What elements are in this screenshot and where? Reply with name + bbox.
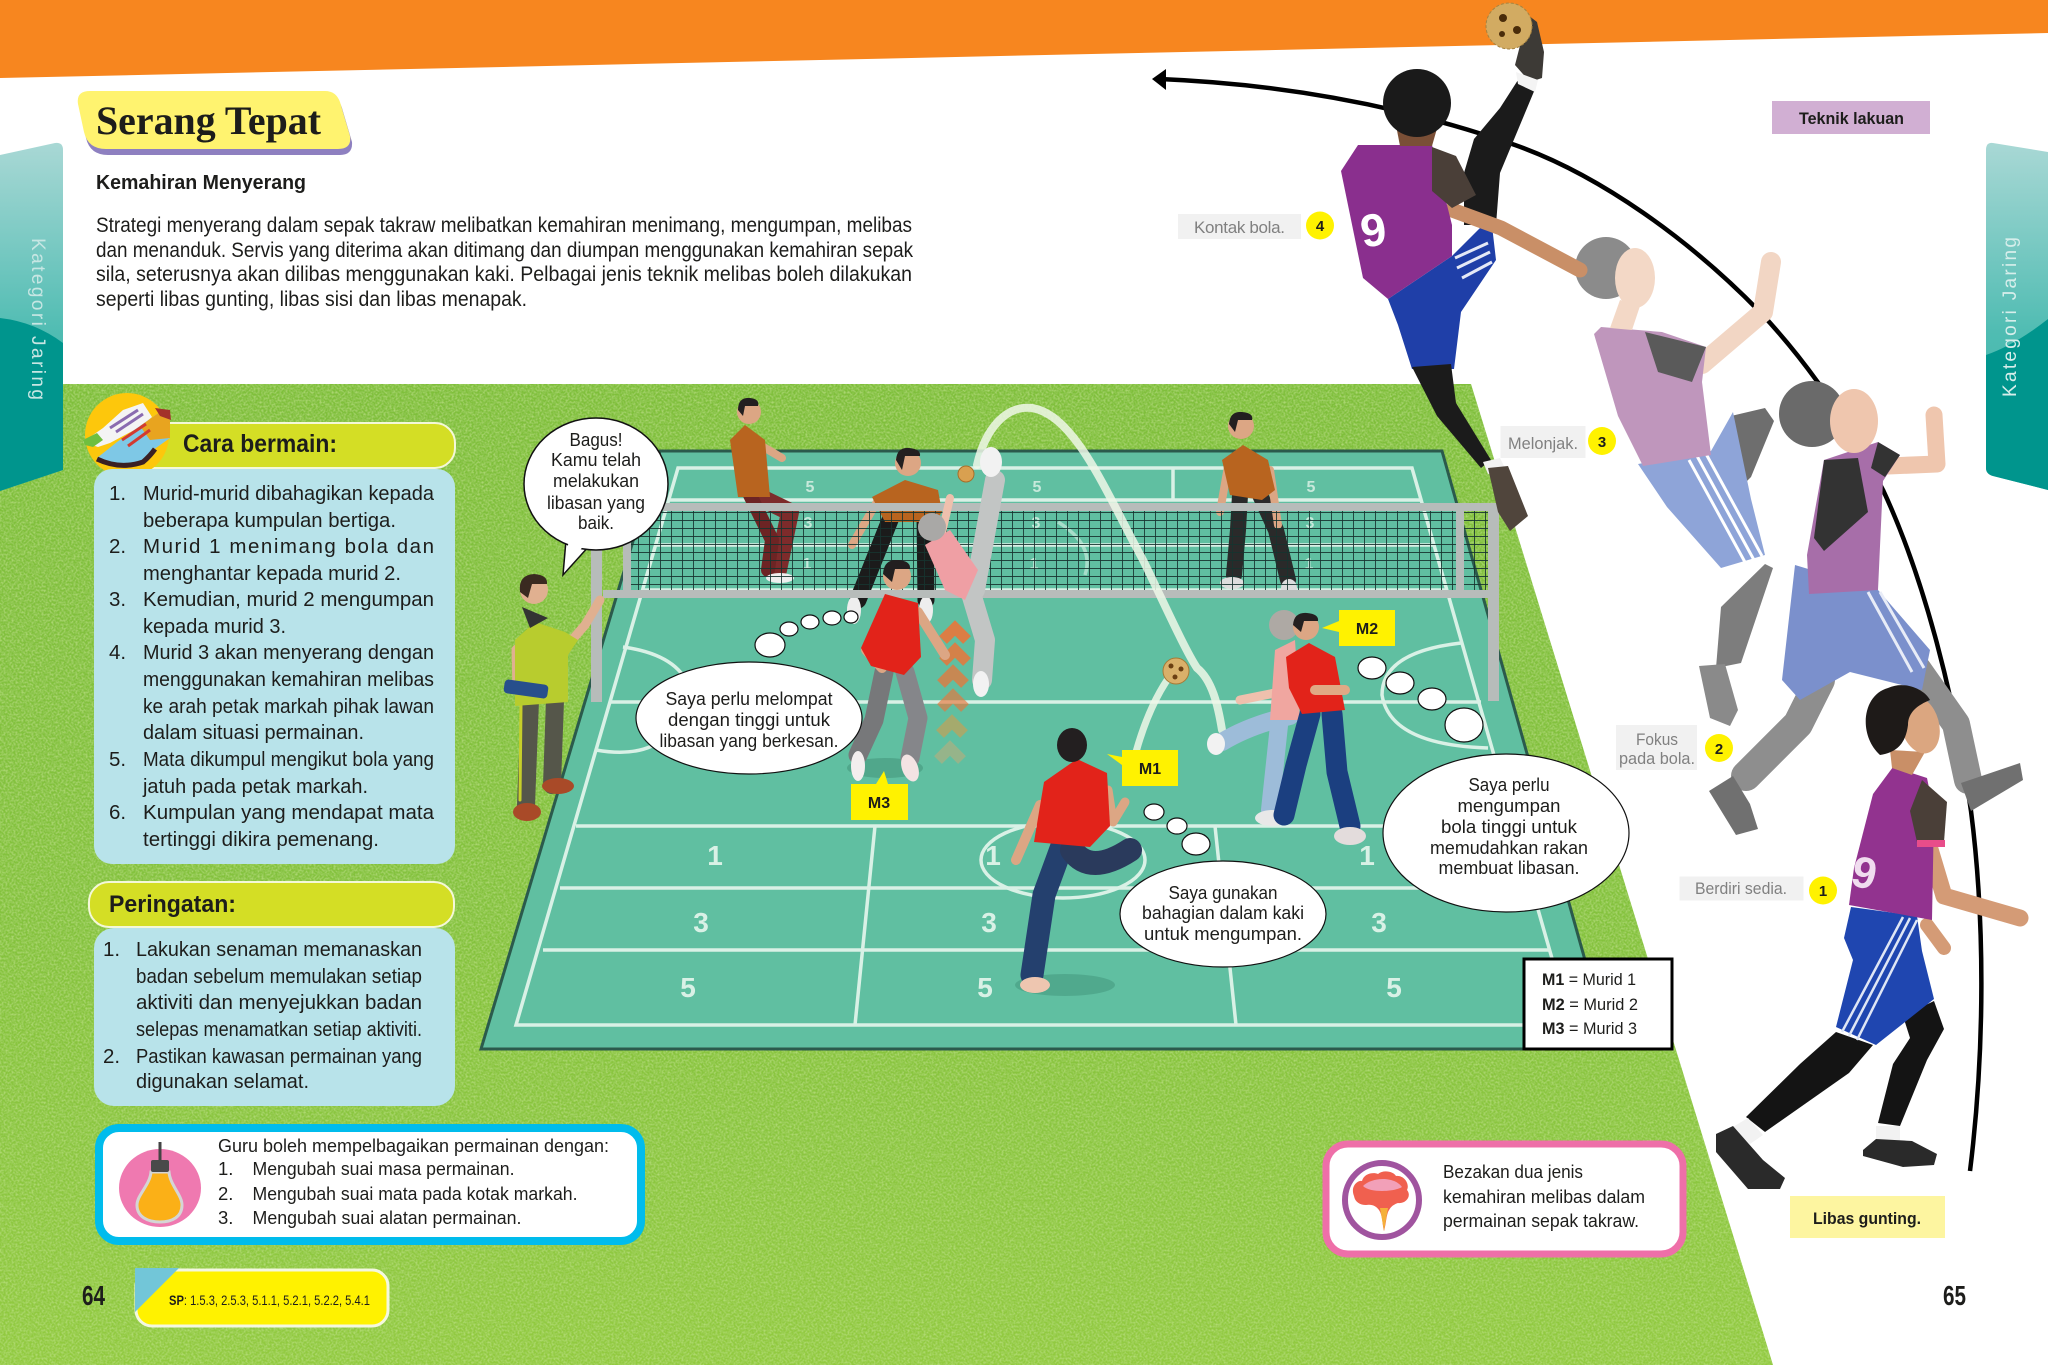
thought bubble: M1: Saya gunakan [1168,883,1278,903]
label: teknik lakuan: Teknik lakuan [1799,109,1904,128]
court numbers: 1 [985,840,1001,871]
step 1 label: 1 [1819,883,1827,900]
court numbers: 5 [1307,479,1316,496]
thought bubble: M3: dengan tinggi untuk [668,710,831,730]
figure: step 2 focus (faded) [1709,381,2023,835]
panel: peringatan list: 1. [103,938,120,961]
court numbers: 1 [1359,840,1375,871]
speech bubble: coach: melakukan [553,471,639,491]
speech bubble: coach: libasan yang [547,493,645,513]
panel: cara bermain steps: menggunakan kemahiran melibas [143,668,434,691]
speech bubble: coach [524,418,668,575]
panel: peringatan list: 2. [103,1045,120,1068]
step 4 label [1178,212,1334,240]
step 3 label: 3 [1598,434,1606,451]
panel: cara bermain steps: jatuh pada petak markah. [142,775,368,798]
step 4 label: 4 [1316,218,1325,235]
step 4 label: Kontak bola. [1194,218,1285,237]
motion arc arrow [1152,69,1981,1171]
ball in the air near net [958,466,974,482]
court numbers: 3 [1032,515,1041,532]
legend box [1524,959,1672,1049]
label M3: M3 [868,795,890,812]
thought bubble: M2: membuat libasan. [1438,858,1580,878]
court numbers [680,479,1402,1003]
panel: cara bermain steps: ke arah petak markah pihak lawan [143,695,434,718]
panel: cara bermain steps: 5. [109,748,126,771]
ball flight trail [977,408,1222,752]
figure: step 1 ready [1716,685,2020,1189]
panel: cara bermain steps: Kumpulan yang mendapat mata [143,801,435,824]
thought bubble: M2: memudahkan rakan [1430,838,1588,858]
standards tag [135,1268,388,1326]
panel: cara bermain steps: Murid 1 menimang bola dan [143,535,434,558]
panel: cara bermain steps: beberapa kumpulan bertiga. [143,509,396,532]
note text: Mengubah suai mata pada kotak markah. [252,1183,578,1204]
step 2 label: Fokus [1636,730,1678,749]
prompt text: kemahiran melibas dalam [1443,1186,1645,1207]
left side tab [0,143,63,491]
thought bubble: M3: libasan yang berkesan. [660,731,838,751]
panel: peringatan list: badan sebelum memulakan setiap [136,965,422,988]
step 2 label [1616,725,1733,770]
panel: cara bermain steps: 3. [109,588,126,611]
legend box: M1 = Murid 1 [1542,970,1636,989]
panel: cara bermain steps: 2. [109,535,126,558]
intro text block: Strategi menyerang dalam sepak takraw melibatkan kemahiran menimang, mengumpan, melibas [96,214,912,237]
rising chevrons [938,628,967,760]
grass field [0,384,1773,1365]
player M2 with ghost [1207,610,1366,845]
title [78,91,352,155]
caption: libas gunting: Libas gunting. [1813,1209,1921,1228]
panel: cara bermain steps: 6. [109,801,126,824]
note text [218,1135,609,1228]
court numbers: 3 [804,515,813,532]
step 3 label [1500,426,1616,458]
step 3 label: Melonjak. [1508,434,1578,453]
panel: cara bermain steps: menghantar kepada murid 2. [143,562,401,585]
note text: Mengubah suai alatan permainan. [252,1207,522,1228]
panel: cara bermain header [92,423,455,468]
icon: shoes [83,393,171,477]
standards tag: SP: 1.5.3, 2.5.3, 5.1.1, 5.2.1, 5.2.2, 5.4.1 [169,1293,370,1308]
panel: cara bermain steps: Murid 3 akan menyerang dengan [143,641,434,664]
panel: peringatan list: selepas menamatkan setiap aktiviti. [136,1018,422,1041]
thought bubble: M2 [1358,657,1629,912]
opponent player right [1220,412,1297,597]
prompt text: Bezakan dua jenis [1443,1161,1583,1182]
label: teknik lakuan [1772,101,1930,134]
speech bubble: coach: baik. [578,513,614,533]
panel: cara bermain steps: Mata dikumpul mengikut bola yang [143,748,434,771]
step 1 label: Berdiri sedia. [1695,879,1787,898]
opponent player left [730,398,794,583]
thought bubble: M3 [636,611,862,774]
step 2 label: pada bola. [1619,749,1695,768]
panel: peringatan header [89,882,454,927]
thought bubble: M3: Saya perlu melompat [666,689,832,709]
thought bubble: M2: mengumpan [1458,796,1560,816]
thought bubble: M1: untuk mengumpan. [1144,924,1302,944]
panel: peringatan list: Pastikan kawasan permainan yang [136,1045,422,1068]
intro text block: dan menanduk. Servis yang diterima akan ditimang dan diumpan menggunakan kemahiran sepak [96,239,913,262]
panel: cara bermain steps: kepada murid 3. [143,615,286,638]
jumping player ghost [918,447,1002,697]
panel: peringatan list: Lakukan senaman memanaskan [136,938,422,961]
page number 65: 65 [1943,1280,1966,1311]
opponent player centre [847,448,942,624]
label M2 [1322,610,1395,646]
panel: cara bermain steps: Kemudian, murid 2 mengumpan [143,588,434,611]
panel: teacher note [99,1128,641,1241]
figure: step 4 contact [1341,3,1580,531]
panel: cara bermain steps: 1. [109,482,126,505]
panel: cara bermain steps: Murid-murid dibahagikan kepada [143,482,435,505]
figure: step 3 jump (faded) [1575,237,1774,726]
legend box: M3 = Murid 3 [1542,1019,1637,1038]
ball in the middle [1163,658,1189,684]
prompt text [1443,1161,1645,1231]
note text: Mengubah suai masa permainan. [252,1158,514,1179]
court numbers: 5 [977,972,993,1003]
label M1 [1107,750,1178,786]
court numbers: 5 [1386,972,1402,1003]
panel: cara bermain steps: tertinggi dikira pemenang. [143,828,379,851]
panel: cara bermain steps: 4. [109,641,126,664]
court numbers: 1 [1030,556,1039,573]
orange top banner [0,0,2048,78]
court numbers: 1 [707,840,723,871]
label M3 [851,771,908,820]
thought bubble: M1: bahagian dalam kaki [1142,903,1304,923]
figure: step 4 contact: 9 [1357,202,1390,258]
title: Serang Tepat [96,98,322,143]
intro text block [96,214,913,311]
panel: cara bermain steps: dalam situasi permainan. [143,721,364,744]
intro text block: sila, seterusnya akan dilibas menggunakan kaki. Pelbagai jenis teknik melibas boleh dilakukan [96,263,912,286]
court numbers: 5 [1033,479,1042,496]
label M2: M2 [1356,621,1378,638]
panel: peringatan list [94,928,455,1106]
court numbers: 1 [1305,556,1314,573]
player M3 [847,560,945,784]
panel: peringatan list: digunakan selamat. [136,1070,309,1093]
sepak takraw court [481,451,1610,1049]
panel: peringatan header: Peringatan: [109,891,236,918]
legend box: M2 = Murid 2 [1542,995,1638,1014]
thought bubble: M2: Saya perlu [1468,775,1550,795]
ball on foot [1486,3,1544,82]
thought bubble: M1 [1120,804,1326,967]
speech bubble: coach: Kamu telah [551,450,641,470]
prompt text: permainan sepak takraw. [1443,1210,1639,1231]
court numbers: 5 [680,972,696,1003]
note text: 1. [218,1158,233,1179]
panel: cara bermain header: Cara bermain: [183,430,337,458]
note text: Guru boleh mempelbagaikan permainan dengan: [218,1135,609,1156]
panel: thinking prompt [1326,1144,1683,1254]
net [591,503,1499,702]
left tab label: Kategori Jaring [27,238,48,400]
note text: 3. [218,1207,233,1228]
panel: peringatan list: aktiviti dan menyejukkan badan [136,991,422,1014]
player M1 [1015,728,1130,996]
referee [503,574,600,821]
court numbers: 3 [1306,515,1315,532]
court numbers: 1 [803,556,812,573]
note text: 2. [218,1183,233,1204]
page number 64: 64 [82,1280,105,1311]
intro text block: seperti libas gunting, libas sisi dan libas menapak. [96,288,527,311]
court numbers: 3 [1371,907,1387,938]
icon: brain [1345,1163,1419,1237]
court numbers: 3 [981,907,997,938]
step 2 label: 2 [1715,741,1723,758]
icon: light bulb [119,1142,201,1227]
thought bubble: M2: bola tinggi untuk [1441,817,1578,837]
panel: cara bermain steps [94,469,455,864]
subheading: Kemahiran Menyerang [96,172,306,194]
right side tab [1986,143,2048,490]
speech bubble: coach: Bagus! [570,430,622,450]
court numbers: 3 [693,907,709,938]
label M1: M1 [1139,761,1161,778]
caption: libas gunting [1790,1196,1945,1238]
right tab label: Kategori Jaring [2000,237,2021,397]
step 1 label [1680,876,1837,904]
court numbers: 5 [806,479,815,496]
figure: step 1 ready: 9 [1847,847,1881,900]
